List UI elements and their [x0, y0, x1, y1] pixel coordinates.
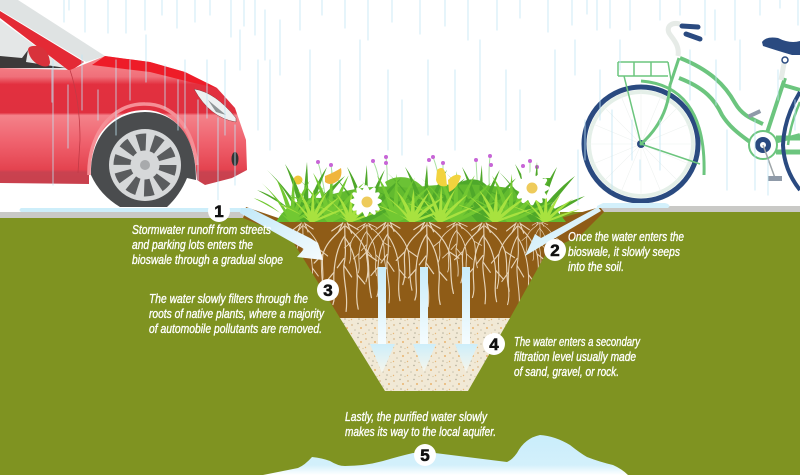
grass tufts middle [254, 171, 555, 222]
daisy right [517, 173, 547, 203]
rim [109, 129, 181, 201]
badge 3 [317, 279, 339, 301]
arrow down 1 [370, 267, 395, 373]
step 2 text: into the soil. [568, 259, 624, 274]
arrow: runoff into swale [240, 208, 323, 260]
car body [0, 56, 247, 185]
arrow down 3 [455, 267, 478, 372]
spoke gaps [122, 142, 168, 188]
chain guard [776, 138, 800, 152]
badge 4: 4 [489, 335, 499, 354]
step 2 text: bioswale, it slowly seeps [568, 244, 680, 259]
headlight [194, 89, 236, 122]
badge 5: 5 [420, 446, 430, 465]
bioswale cross-section [243, 207, 604, 391]
bicycle [584, 23, 800, 201]
step 2 text: Once the water enters the [568, 229, 684, 244]
fog lamp [232, 152, 238, 166]
step 1 text: bioswale through a gradual slope [132, 252, 283, 267]
badge 2: 2 [550, 241, 560, 260]
broad leaves [328, 177, 552, 222]
mirror [28, 46, 50, 66]
step 4 text: filtration level usually made [514, 349, 636, 364]
step 3 text: roots of native plants, where a majority [149, 306, 325, 321]
sand and gravel layer [340, 318, 510, 391]
roof pillar [0, 11, 84, 70]
arrow down 2 [413, 267, 436, 372]
badge 2 [544, 239, 566, 261]
roots [279, 221, 559, 311]
step 3 text: The water slowly filters through the [149, 291, 308, 306]
badge 4 [483, 333, 505, 355]
rear wheel [783, 92, 800, 190]
rain [52, 0, 798, 205]
crank and chain ring [749, 131, 777, 159]
green base mass [276, 184, 566, 222]
grass tufts front [278, 186, 580, 222]
badge 5 [414, 444, 436, 466]
door shut line [70, 70, 80, 173]
window glass [0, 20, 68, 70]
seat post [781, 58, 785, 80]
aquifer [263, 435, 628, 475]
step 3 text: of automobile pollutants are removed. [149, 321, 322, 336]
step 5 text: Lastly, the purified water slowly [345, 409, 488, 424]
windshield [0, 0, 105, 62]
daisy front [352, 187, 380, 215]
step 1 text: Stormwater runoff from streets [132, 222, 271, 237]
rack [618, 62, 700, 164]
plants [254, 154, 585, 222]
saddle [762, 38, 800, 55]
car [0, 0, 247, 207]
butterflies [325, 168, 461, 192]
badge 1: 1 [214, 202, 224, 221]
hood shading [92, 56, 217, 88]
badge 3: 3 [323, 281, 333, 300]
step 4 text: of sand, gravel, or rock. [514, 364, 619, 379]
tyre and wheel well [91, 112, 196, 207]
road runoff left [20, 208, 243, 212]
left sidewalk [0, 212, 243, 218]
frame [680, 58, 763, 124]
arrow: water seeping from right [525, 207, 601, 256]
step 4 text: The water enters a secondary [514, 334, 641, 349]
wheel arch highlight [89, 104, 197, 175]
right sidewalk [600, 206, 800, 212]
flowers behind grass [285, 154, 539, 195]
puddle right [597, 203, 669, 208]
step 5 text: makes its way to the local aquifer. [345, 424, 496, 439]
soil layer [243, 207, 604, 318]
right ground raise [560, 212, 800, 220]
front wheel [584, 87, 698, 201]
badge 1 [208, 200, 230, 222]
step 1 text: and parking lots enters the [132, 237, 253, 252]
fender [641, 81, 704, 175]
ground [0, 218, 800, 475]
handlebars [668, 23, 680, 56]
grass tufts back [257, 162, 585, 222]
